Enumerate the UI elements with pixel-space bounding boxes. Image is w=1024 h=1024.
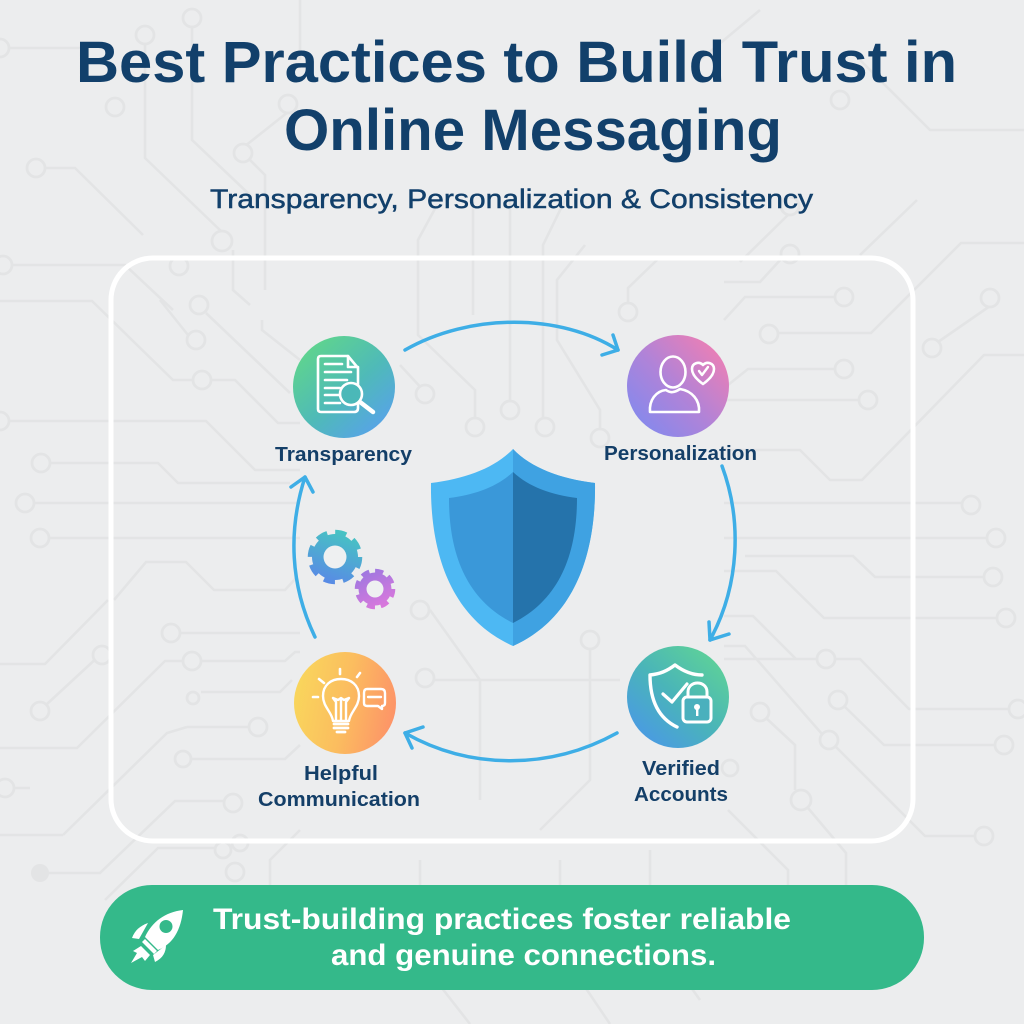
icon: transparency (293, 336, 395, 438)
central shield (431, 449, 595, 646)
arrow: helpful communication to transparency (291, 477, 315, 637)
title: Best Practices to Build Trust in (76, 30, 957, 95)
arrow: personalization to verified accounts (709, 466, 735, 640)
icon: rocket (131, 910, 183, 963)
banner message: and genuine connections. (331, 939, 716, 972)
subtitle: Transparency, Personalization & Consistency (210, 184, 814, 214)
title: Online Messaging (284, 98, 782, 163)
banner (100, 885, 924, 990)
label: helpful communication (258, 763, 420, 811)
banner message: Trust-building practices foster reliable (213, 903, 791, 936)
label: transparency: Transparency (275, 444, 413, 466)
icon: helpful communication (294, 652, 396, 754)
label: personalization: Personalization (604, 443, 757, 465)
title (76, 30, 957, 163)
icon: gears (311, 533, 392, 606)
background filled node (31, 864, 49, 882)
arrow: transparency to personalization (405, 322, 618, 355)
arrow: verified accounts to helpful communication (405, 727, 617, 761)
label: verified accounts: Accounts (634, 784, 728, 806)
label: verified accounts: Verified (642, 758, 720, 780)
icon: verified accounts (627, 646, 729, 748)
label: helpful communication: Communication (258, 789, 420, 811)
icon: personalization (627, 335, 729, 437)
label: helpful communication: Helpful (304, 763, 378, 785)
panel: trust cycle (111, 258, 913, 841)
banner message (213, 903, 791, 972)
label: verified accounts (634, 758, 728, 806)
